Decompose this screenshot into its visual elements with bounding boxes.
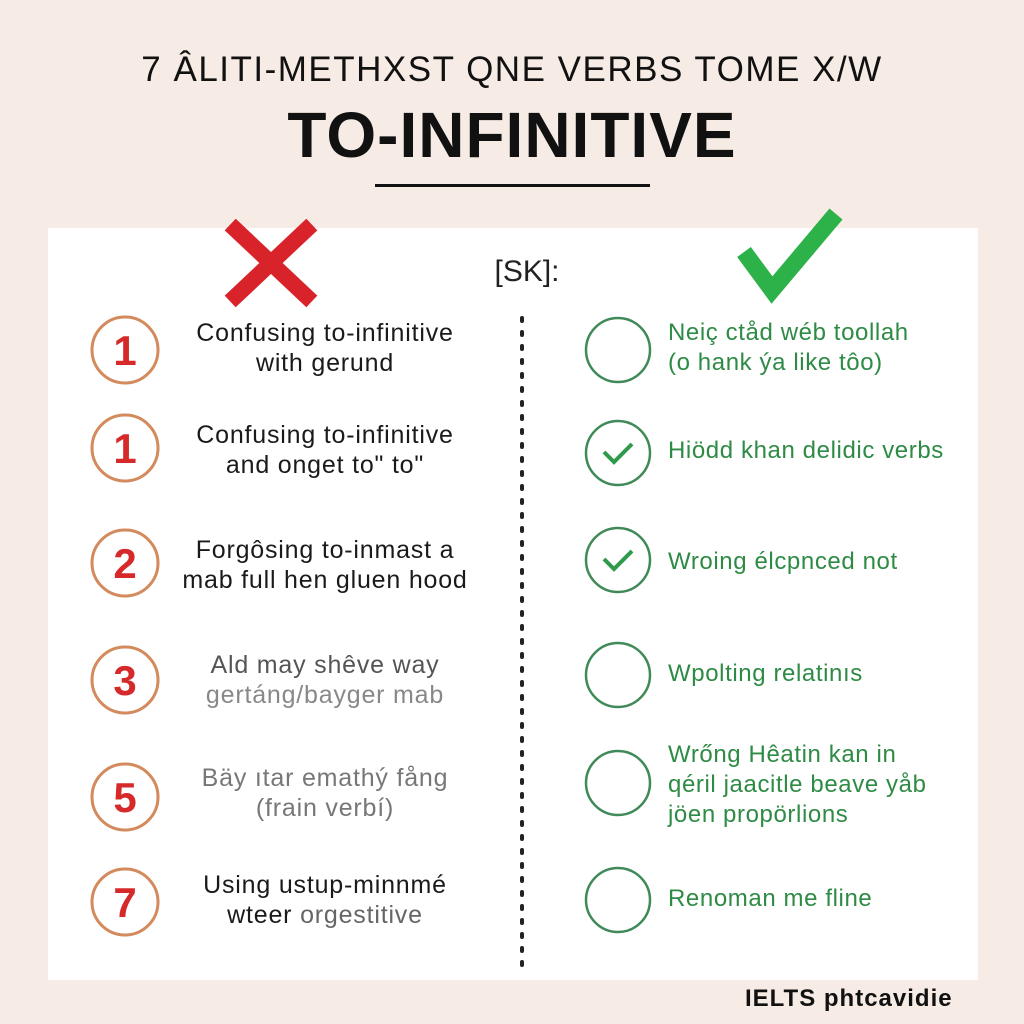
underline bbox=[375, 184, 650, 187]
text: mab full hen gluen hood bbox=[182, 566, 468, 594]
left text items: Confusing to-infinitive bbox=[196, 319, 454, 347]
label SK: [SK]: bbox=[494, 255, 560, 288]
text: Wroing élcpnced not bbox=[668, 548, 898, 575]
main panel bbox=[48, 228, 978, 980]
left number badges: 7 bbox=[113, 879, 137, 926]
text: qéril jaacitle beave yåb bbox=[668, 771, 927, 798]
icon: red cross bbox=[236, 230, 306, 296]
left number badges: 2 bbox=[113, 540, 137, 587]
right text items: (o hank ýa like tôo) bbox=[668, 349, 883, 376]
text: Forgôsing to-inmast a bbox=[196, 536, 454, 564]
left number badges bbox=[92, 317, 158, 935]
text: Renoman me fline bbox=[668, 885, 872, 912]
right check circles bbox=[586, 318, 650, 932]
text: Wrőng Hêatin kan in bbox=[668, 741, 896, 768]
footer brand: IELTS phtcavidie bbox=[745, 985, 953, 1012]
left number badges: 1 bbox=[113, 327, 137, 374]
text: Hiödd khan delidic verbs bbox=[668, 437, 944, 464]
left number badges: 3 bbox=[113, 657, 137, 704]
text: jöen propörlions bbox=[668, 801, 848, 828]
icon: green check bbox=[744, 214, 836, 290]
main title: TO-INFINITIVE bbox=[287, 99, 737, 171]
text: (frain verbí) bbox=[256, 794, 394, 822]
left text items: with gerund bbox=[256, 349, 394, 377]
text: Wpolting relatinıs bbox=[668, 660, 863, 687]
text: Confusing to-infinitive bbox=[196, 421, 454, 449]
right text items: Neiç ctåd wéb toollah bbox=[668, 319, 909, 346]
left text items bbox=[196, 319, 454, 377]
left number badges: 5 bbox=[113, 774, 137, 821]
right text items bbox=[668, 319, 909, 376]
text: Bäy ıtar emathý fång bbox=[202, 764, 448, 792]
dotted divider bbox=[520, 318, 524, 970]
text: Using ustup-minnmé bbox=[203, 871, 447, 899]
text: and onget to" to" bbox=[226, 451, 424, 479]
title line 1: 7 ÂLITI-METHXST QNE VERBS TOME X/W bbox=[141, 50, 883, 89]
text: Ald may shêve way bbox=[211, 651, 439, 679]
text: gertáng/bayger mab bbox=[206, 681, 444, 709]
text: wteer orgestitive bbox=[227, 901, 423, 929]
left number badges: 1 bbox=[113, 425, 137, 472]
